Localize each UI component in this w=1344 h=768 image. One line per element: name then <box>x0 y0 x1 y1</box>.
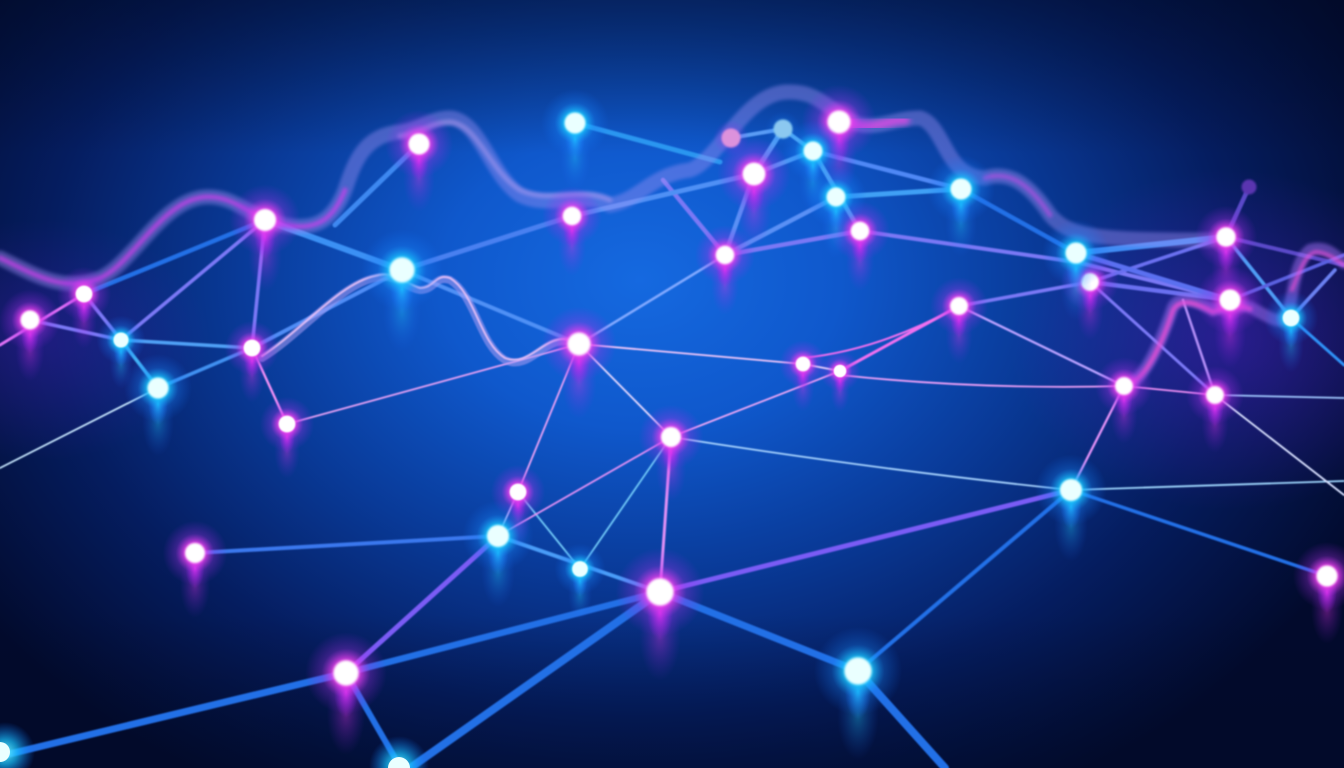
upper wave ribbon <box>0 92 1210 284</box>
purple side tints <box>0 170 1344 510</box>
purple connections <box>30 129 1344 673</box>
bottom edge nodes <box>0 722 429 768</box>
cyan nodes <box>97 89 1318 759</box>
middle wave ribbon <box>262 275 570 362</box>
thin light connections <box>0 255 1344 592</box>
right wave ribbon <box>1133 249 1344 382</box>
dim background nodes <box>713 111 1256 194</box>
